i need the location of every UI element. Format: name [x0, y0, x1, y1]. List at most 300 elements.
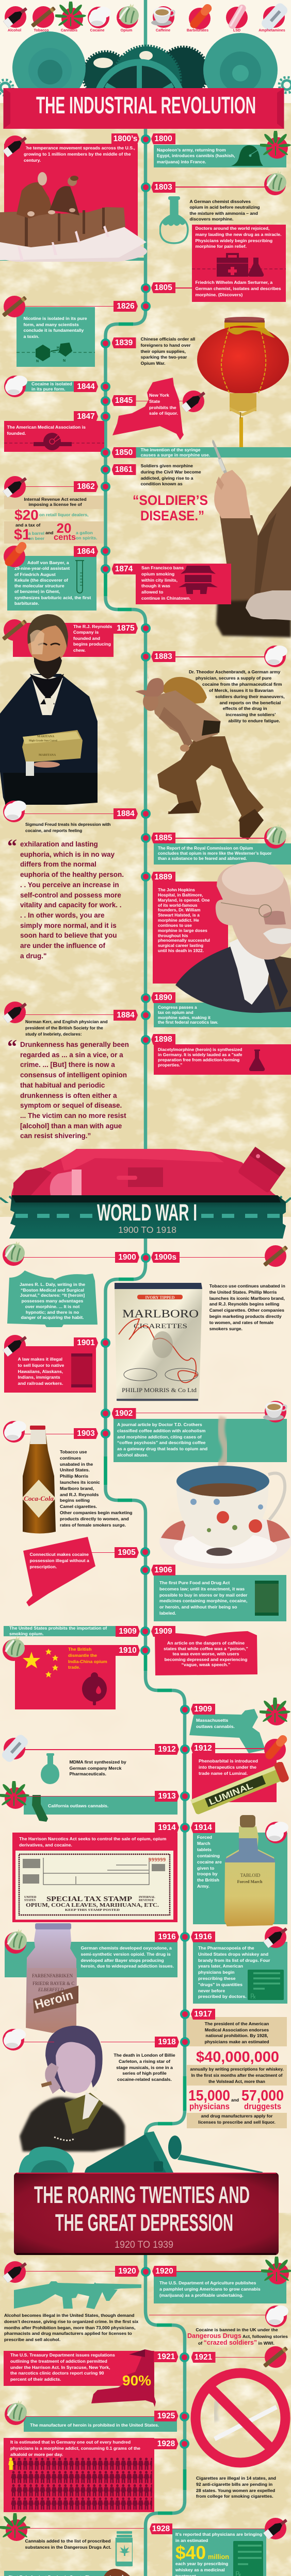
text: Norman Kerr: study of Inebriety, declares:: [25, 1031, 82, 1037]
year tag: 1921: [195, 2353, 212, 2362]
text: Baeyer: [14, 560, 91, 606]
year tag: [155, 1931, 179, 1942]
text: Pharmacopoeia: "drugs" in quantities: [198, 1982, 242, 1987]
text: Harrison Act: The Harrison Narcotics Act seeks to control the sale of opium, opium: [19, 1836, 166, 1841]
text: MDMA: German company Merck: [69, 1766, 121, 1771]
drug legend row: [3, 2, 287, 32]
icon: cannabis: [260, 131, 291, 162]
year tag: 1803: [154, 183, 172, 192]
text: Freud: cocaine, and reports feeling: [25, 828, 82, 833]
icon: alcohol: [0, 997, 30, 1028]
text: Serturner: German chemist, isolates and describes: [195, 286, 281, 291]
text: Marlboro: Camel cigarettes. Other companies: [209, 1308, 284, 1313]
text: AMA prohibition: national prohibition. By 1928,: [205, 2033, 268, 2038]
connector: [23, 2416, 154, 2417]
illustration: Tabloid Forced March bottle: Forced March: [237, 1879, 263, 1884]
year tag: 1889: [154, 873, 172, 882]
year tag: 1909: [194, 1705, 212, 1714]
icon: barbiturates: [189, 4, 212, 29]
text: Johns Hopkins: phenomenally successful: [158, 938, 210, 943]
icon: scroll: [254, 1581, 279, 1616]
text: on spirits: a gallon: [76, 530, 93, 535]
text: coffee journal: classified coffee addition with alcoholism: [117, 1428, 205, 1433]
banner: The Industrial Revolution: [3, 88, 284, 129]
text: Billie Carleton: The death in London of Billie: [114, 2053, 175, 2058]
text: cigarettes illegal: 92 anti-cigarette bills are pending in: [196, 2482, 272, 2487]
text: China opium trade: The British: [68, 1647, 91, 1652]
stat: 15,000 physicians and 57,000 druggests: and: [231, 2097, 239, 2103]
node: [140, 833, 151, 843]
text: AMA prohibition: Medical Association endorses: [205, 2027, 269, 2032]
connector: [23, 2528, 144, 2529]
year tag: 1913: [158, 1792, 176, 1801]
illustration: Luminal tube: LUMINAL: [207, 1781, 254, 1807]
year tag: [151, 182, 175, 193]
text: tobacco women: Camel cigarettes.: [60, 1504, 97, 1509]
text: prescriptions: [187, 2066, 287, 2084]
text: NY prohibits liquor: New York: [149, 393, 169, 398]
icon: cocaine: [260, 640, 291, 671]
panel: morphine: [192, 225, 286, 302]
icon: California: [30, 1794, 50, 1823]
stat: $40 million: [174, 2544, 231, 2562]
portrait: R.J. Reynolds: MARITANA: [37, 735, 55, 738]
node: [180, 1791, 190, 1801]
strip: syringe: [135, 447, 291, 457]
portrait: Billie Carleton: [19, 2025, 128, 2154]
text: syringe: [141, 447, 210, 457]
text: AMA founded: founded.: [7, 431, 26, 436]
banner: World War I tread: WORLD WAR I: [97, 1199, 197, 1226]
text: Johns Hopkins: morphine addict. He: [158, 918, 199, 923]
text: tobacco women: Tobacco use: [60, 1449, 87, 1454]
text: Daly: danger of acquiring the habit.: [21, 1315, 84, 1320]
year tag: [116, 1645, 140, 1656]
node: [101, 411, 110, 421]
text: phenobarbital: [199, 1758, 258, 1776]
quote: Freud: are under the influence of: [20, 942, 105, 950]
text: Freud: Sigmund Freud treats his depression with: [25, 822, 111, 827]
text: Pharmacopoeia: [198, 1945, 270, 2000]
year tag: 1861: [115, 465, 133, 474]
text: alcohol illegal: prescribe and sell alcohol.: [4, 2337, 60, 2342]
text: cigarettes illegal: from college for smoking cigarettes.: [196, 2494, 273, 2499]
node: [140, 1035, 151, 1045]
text: whiskey intro: It’s reported that physicians are bringing: [175, 2532, 262, 2537]
year tag: [115, 1547, 139, 1558]
icon: amphetamines: [262, 3, 287, 30]
illustration: Tabloid Forced March bottle: [222, 1814, 278, 1928]
year tag: 1800’s: [114, 134, 137, 143]
text: Pure Food and Drug Act: becomes law; until its enactment, it was: [159, 1586, 245, 1591]
quote: Kerr: symptom or sequel of disease.: [20, 1101, 122, 1109]
illustration: football: [98, 2568, 146, 2576]
text: NY prohibits liquor: [149, 393, 178, 417]
quote: Kerr: crime. ... [But] there is now a: [20, 1061, 115, 1069]
node: [140, 134, 151, 144]
connector: [23, 1749, 155, 1750]
text: San Francisco: allowed to: [141, 589, 163, 595]
text: Massachusetts: outlaws cannabis.: [196, 1724, 235, 1729]
connector: [23, 2041, 54, 2042]
text: coffee journal: “coffee psychosis” and describing coffee: [117, 1440, 205, 1445]
year tag: [151, 992, 175, 1003]
portrait: R.J. Reynolds: [0, 613, 101, 806]
legend label: Opium: [121, 28, 132, 32]
portrait: R.J. Reynolds: MARITANA: [39, 754, 56, 757]
illustration: Marlboro pack: IVORY TIPPED: [145, 1295, 175, 1300]
text: caffeine article: states that while coffee was a “poison,”: [164, 1646, 248, 1651]
portrait: R.J. Reynolds: High Grade Sun Cured: [29, 739, 57, 742]
text: tobacco women: begins selling: [60, 1498, 90, 1503]
node: [140, 1646, 150, 1655]
text: morphine: discovers morphine.: [190, 216, 233, 222]
node: [180, 2411, 189, 2421]
text: Treasury: the narcotics clinic doctors report curing 90: [10, 2370, 104, 2376]
year tag: 1925: [157, 2412, 175, 2420]
panel: heroin prohibited: [24, 2417, 177, 2432]
icon: alcohol: [3, 6, 27, 28]
text: heroin synthesized: [158, 1047, 242, 1067]
illustration: men smashing barrels: [0, 172, 147, 262]
quote: Freud: . . You perceive an increase in: [20, 881, 119, 889]
node: [180, 1932, 190, 1941]
node: [140, 651, 151, 662]
text: MDMA: Pharmaceuticals.: [69, 1771, 106, 1776]
node: [140, 1010, 151, 1020]
year tag: 1912: [158, 1745, 176, 1754]
image: special tax stamp: REVENUE: [139, 1899, 154, 1902]
illustration: Marlboro pack: MARLBORO: [122, 1307, 199, 1320]
panel: caffeine book: [154, 1630, 258, 1676]
icon: opium: [1, 1927, 31, 1958]
text: heroin synthesized: in Germany. It is widely lauded as a "safe: [158, 1052, 242, 1057]
node: [180, 1704, 190, 1715]
icon: alcohol: [0, 2257, 30, 2287]
text: Billie Carleton: cocaine-related scandals.: [117, 2077, 172, 2082]
quote: Kerr: that habitual and periodic: [20, 1081, 105, 1089]
illustration: Marlboro pack: PHILIP MORRIS & Co Ltd: [122, 1386, 197, 1394]
quote: Freud: euphoria, which is in no way: [20, 851, 115, 858]
text: Marlboro: smokers surge.: [209, 1326, 242, 1331]
panel: Pure Food and Drug Act: [154, 1575, 286, 1621]
node: [140, 301, 151, 311]
stat: 20 cents: 20: [57, 520, 71, 536]
text: Norman Kerr: Norman Kerr, and English physician and: [25, 1019, 108, 1024]
text: Johns Hopkins: throughout his: [158, 933, 188, 938]
image: special tax stamp: INTERNAL: [139, 1896, 155, 1899]
text: Baeyer: Adolf von Baeyer, a: [27, 560, 69, 565]
year tag: 1916: [194, 1933, 212, 1941]
year tag: 1902: [115, 1409, 133, 1418]
year tag: [111, 447, 136, 458]
text: Serturner: [195, 280, 281, 298]
quote: Kerr: Drunkenness has generally been: [20, 1041, 129, 1048]
connector: [92, 1552, 115, 1553]
text: Aschenbrandt: of Merck, issues it to Bavarian: [209, 688, 273, 693]
text: coffee journal: [117, 1422, 207, 1459]
text: first narcotics law: tax on opium and: [158, 1010, 193, 1015]
image: special tax stamp: SPECIAL TAX STAMP: [46, 1895, 133, 1903]
quote: Kerr: regarded as ... a sin a vice, or a: [20, 1051, 123, 1059]
icon: LSD: [226, 4, 248, 29]
panel: Treasury: [4, 2351, 154, 2386]
icon: prescription pad: [248, 1970, 284, 2001]
node: [101, 1409, 110, 1418]
text: Forced March: cocaine are: [197, 1859, 222, 1865]
text: AMA prohibition: [187, 2021, 287, 2045]
text: Billie Carleton: stage musicals, is one in a: [116, 2065, 173, 2070]
text: prescriptions: the Volstead Act, more than: [208, 2079, 265, 2084]
year tag: [151, 1626, 175, 1637]
stat: 90%: 90%: [122, 2372, 151, 2388]
year tag: 1850: [115, 448, 133, 457]
text: RJ Reynolds: Company is: [73, 630, 99, 635]
text: revenue act: imposing a license fee of: [28, 502, 82, 507]
text: Pharmacopoeia: The Pharmacopoeia of the: [198, 1945, 254, 1951]
stat: $20: $20: [14, 507, 39, 523]
year tag: [74, 381, 98, 392]
icon: barbiturates: [0, 539, 30, 570]
icon: alcohol: [260, 1922, 291, 1953]
quote: Freud: self-control and possess more: [20, 891, 121, 899]
legend label: Tobacco: [34, 28, 49, 32]
icon: tobacco: [260, 2342, 291, 2372]
icon: medical kit and flask: [192, 252, 286, 278]
text: Massachusetts: [196, 1718, 235, 1730]
text: first narcotics law: the first federal narcotics law.: [158, 1020, 218, 1025]
text: Pharmacopoeia: years later, American: [198, 1963, 243, 1969]
stat: 15,000 physicians and 57,000 druggests: 57,000: [241, 2088, 284, 2104]
text: Pure Food and Drug Act: medicines containing morphine, cocaine,: [159, 1598, 247, 1603]
year tag: [191, 2352, 216, 2363]
quote: Kerr: consensus of intelligent opinion: [20, 1071, 127, 1079]
year tag: 1920: [118, 2267, 136, 2276]
node: [140, 283, 151, 293]
node: [140, 993, 151, 1003]
text: Aschenbrandt: physician, secures a supply of pure: [196, 675, 271, 681]
icon: cocaine: [0, 370, 31, 401]
text: Marlboro: Tobacco use continues unabated in: [209, 1283, 285, 1289]
year tag: 1884: [117, 809, 135, 818]
text: Treasury: outlining the treatment of addiction permitted: [10, 2359, 107, 2364]
text: morphine physicians: [10, 2439, 140, 2458]
year tag: 1928: [152, 2524, 170, 2533]
text: China opium trade: trade.: [68, 1665, 80, 1670]
text: alcohol illegal: [4, 2313, 138, 2343]
icon: prescription pad: ℞: [250, 1992, 256, 2000]
year tag: [151, 1034, 175, 1045]
text: oxycodone: German chemists developed oxycodone, a: [80, 1945, 172, 1951]
panel: native liquor law: [4, 1346, 96, 1393]
text: Forced March: the British: [197, 1877, 219, 1883]
text: cigarettes illegal: 28 states. Young women are expelled: [196, 2488, 275, 2493]
year tag: [114, 1010, 138, 1021]
text: RJ Reynolds: chew.: [73, 648, 86, 653]
text: Johns Hopkins: founders, Dr. William: [158, 907, 200, 912]
panel: first narcotics law: [154, 1003, 291, 1027]
illustration: Chinese lantern: [196, 315, 291, 460]
stat: 15,000 physicians and 57,000 druggests: physicians: [189, 2102, 230, 2111]
text: coffee journal: as a gateway drug that leads to opium and: [117, 1446, 207, 1451]
text: tobacco women: unabated in the: [60, 1462, 93, 1467]
connector: [215, 2357, 266, 2358]
text: Johns Hopkins: [158, 888, 210, 954]
illustration: Bayer heroin bottle: Heroin: [33, 1988, 75, 2012]
text: Royal Commission: than a substance to be feared and abhorred.: [158, 856, 247, 861]
text: RJ Reynolds: begins producing: [73, 641, 111, 647]
year tag: 1903: [77, 1429, 95, 1438]
text: AMA founded: The American Medical Association is: [7, 425, 86, 430]
text: Pharmacopoeia: prescribing these: [198, 1976, 235, 1981]
year tag: [114, 623, 138, 634]
year tag: 1862: [77, 482, 95, 491]
text: native liquor law: to sell liquor to native: [18, 1363, 64, 1368]
icon: tobacco: [31, 6, 56, 28]
illustration: tea cup with steam: [157, 1414, 291, 1571]
text: California: California outlaws cannabis.: [48, 1803, 108, 1808]
illustration: Bayer heroin bottle: FARBENFABRIKEN: [32, 1973, 73, 1978]
text: doctors rejoiced: [195, 226, 282, 250]
text: caffeine article: “vague, weak speech.”: [182, 1662, 230, 1667]
year tag: [152, 2266, 176, 2277]
year tag: 1885: [154, 834, 172, 842]
panel: 1800s temperance: [4, 144, 138, 258]
text: Forced March: [197, 1835, 222, 1890]
panel: Royal Commission: [154, 843, 291, 865]
quote: Kerr: [alcohol] than a man with ague: [20, 1122, 122, 1130]
text: whiskey intro: in an estimated: [175, 2538, 208, 2543]
panel: first doping rule: [4, 2571, 111, 2576]
text: heroin synthesized: Diacetylmorphine (heroin) is synthesized: [158, 1047, 242, 1052]
icon: test tube: [74, 559, 85, 595]
text: tobacco women: Other companies begin marketing: [60, 1510, 132, 1515]
icon: alcohol: [0, 1330, 30, 1361]
text: cocaine isolated: in its pure form.: [31, 386, 66, 392]
connector: [23, 1796, 155, 1797]
chart: 1 in 100 physicians: [8, 2458, 153, 2511]
tan panel: revenue act: [4, 496, 104, 509]
panel: Johns Hopkins: [153, 882, 228, 984]
text: tobacco women: continues: [60, 1455, 81, 1461]
icon: cannabis: [260, 1698, 290, 1728]
year tag: [111, 464, 136, 475]
connector: [175, 187, 266, 188]
year tag: [74, 546, 98, 557]
banner: Roaring Twenties: [14, 2173, 279, 2256]
strip: cocaine: [23, 381, 74, 392]
year tag: [151, 1565, 175, 1575]
text: San Francisco: [141, 565, 191, 602]
text: RJ Reynolds: founded and: [73, 636, 100, 641]
connector: [175, 656, 266, 657]
year tag: [111, 337, 136, 348]
strip: smoking opium: [4, 1626, 116, 1636]
text: prescriptions: annually by writing prescriptions for whiskey.: [190, 2066, 284, 2072]
text: China opium trade: dismantle the: [68, 1653, 97, 1658]
panel: coffee journal: [114, 1419, 287, 1462]
text: AMA founded: [7, 425, 86, 437]
text: USDA pamphlet: The U.S. Department of Agriculture publishes: [159, 2280, 256, 2285]
stat: $1: $1: [14, 527, 30, 543]
stat: 15,000 physicians and 57,000 druggests: [187, 2087, 287, 2112]
text: native liquor law: A law makes it illegal: [18, 1357, 62, 1362]
icon: cannabis: [0, 2513, 30, 2544]
text: San Francisco: San Francisco bans: [141, 565, 184, 570]
text: NY prohibits liquor: prohibits the: [149, 405, 176, 410]
panel: San Francisco: [136, 564, 231, 604]
text: cigarettes illegal: Cigarettes are illegal in 14 states, and: [196, 2476, 276, 2481]
text: coffee journal: and morphine addiction, citing cases of: [117, 1434, 202, 1439]
text: Billie Carleton: series of high profile: [122, 2071, 167, 2076]
text: temperance: The temperance movement spreads across the U.S.,: [24, 145, 135, 150]
text: opium war: Opium War.: [141, 361, 166, 366]
text: Royal Commission: [158, 846, 272, 861]
text: nicotine: a toxin.: [24, 334, 39, 339]
text: Forced March: Army.: [197, 1884, 209, 1889]
text: Marlboro: and R.J. Reynolds begins selling: [209, 1301, 279, 1307]
icon: cocaine: [0, 1416, 30, 1447]
text: Massachusetts: Massachusetts: [196, 1718, 228, 1723]
year tag: [191, 1743, 215, 1754]
text: Norman Kerr: president of the British Society for the: [25, 1025, 103, 1030]
panel: California cannabis: [24, 1797, 177, 1815]
stat: $40 million: million: [208, 2553, 229, 2561]
text: Treasury: under the Harrison Act. In Syracuse, New York,: [10, 2365, 110, 2370]
year tag: 1912: [194, 1744, 212, 1753]
text: RJ Reynolds: The R.J. Reynolds: [73, 624, 112, 629]
text: licenses: licenses to prescribe and sell liquor.: [198, 2120, 276, 2125]
quote: Freud: [20, 839, 124, 961]
node: [140, 182, 151, 192]
connector: [23, 1433, 74, 1434]
text: opium war: their opium supplies,: [141, 349, 186, 354]
node: [180, 2037, 190, 2046]
text: China opium trade: [68, 1647, 107, 1671]
text: Baeyer: of benzene) in Ghent,: [14, 589, 60, 594]
quote: Kerr: drunkenness is often either a: [20, 1092, 117, 1099]
text: phenobarbital: into therapeutics under the: [199, 1765, 256, 1770]
year tag: 1898: [154, 1035, 172, 1044]
text: tobacco women: launches its iconic: [60, 1480, 100, 1485]
text: Daly: over morphine. ... It is not: [25, 1304, 79, 1309]
node: [180, 2439, 189, 2448]
year tag: [74, 481, 98, 492]
year tag: 1845: [115, 396, 133, 405]
icon: barbiturates: [260, 1733, 291, 1764]
icon: cocaine: [0, 795, 30, 826]
year tag: [191, 1822, 215, 1833]
year tag: [155, 1822, 179, 1833]
icon: cocaine: [261, 2300, 291, 2331]
text: soldiers: during the Civil War become: [141, 469, 201, 474]
text: cocaine isolated: [31, 381, 72, 392]
text: temperance: [24, 145, 135, 163]
icon: opium: [0, 1634, 29, 1665]
icon: nicotine molecule: H: [57, 346, 59, 350]
text: licenses: and drug manufacturers apply for: [201, 2113, 273, 2119]
text: coffee journal: alcohol abuse.: [117, 1452, 148, 1458]
illustration: German soldier: [132, 667, 268, 842]
text: oxycodone: developed after Bayer stops producing: [80, 1958, 164, 1963]
icon: scroll: [71, 1353, 92, 1387]
node: [180, 2352, 189, 2362]
legend label: Amphetamines: [258, 28, 285, 32]
text: on spirits: [76, 530, 98, 540]
text: Aschenbrandt: [0, 669, 291, 726]
text: Pharmacopoeia: physicians begin: [198, 1970, 234, 1975]
node: [140, 872, 151, 881]
